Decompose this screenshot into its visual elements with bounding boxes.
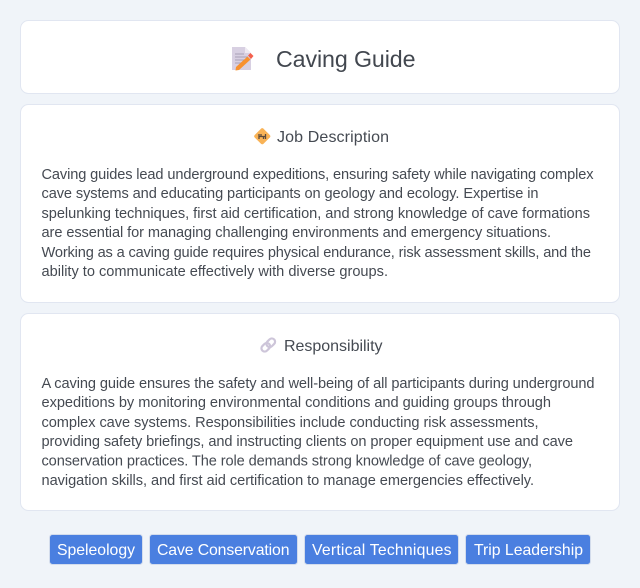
heading: Responsibility: Responsibility [284,338,382,355]
tag: Cave Conservation [150,534,298,564]
tag: Cave Conservation: Cave Conservation [157,542,290,559]
text: responsibility paragraph: navigation skills, and first aid certification to manage emergencies effectively. [42,473,534,489]
text: job description paragraph: Caving guides lead underground expeditions, ensuring safety while navigating complex [42,167,594,183]
text: responsibility paragraph: complex cave systems. Responsibilities include conducting risk assessments, [42,415,538,431]
text: job description paragraph [42,167,594,280]
panel: job description [20,104,620,302]
text: responsibility paragraph: providing safety briefings, and instructing clients on proper equipment use and cave [42,434,573,450]
text: responsibility paragraph: conservation practices. The role demands strong knowledge of cave geology, [42,454,532,470]
panel: responsibility [20,314,620,510]
icon: diamond road sign [253,127,271,145]
text: job description paragraph: are essential for managing challenging environments and emergency situations. [42,225,551,241]
text: job description paragraph: spelunking techniques, first aid certification, and strong knowledge of cave formations [42,206,590,222]
tags row [50,534,590,564]
tag: Trip Leadership [466,534,590,564]
text: job description paragraph: cave systems and educating participants on geology and ecology. Expertise in [42,186,538,202]
panel: title [20,20,620,94]
tag: Trip Leadership: Trip Leadership [474,542,583,559]
tag: Vertical Techniques [304,534,458,564]
text: responsibility paragraph [42,376,594,489]
tag: Speleology [50,534,142,564]
text: job description paragraph: Working as a caving guide requires physical endurance, risk assessment skills, and the [42,245,591,261]
text: responsibility paragraph: A caving guide ensures the safety and well-being of all participants during underground [42,376,594,392]
icon: document with pencil [232,47,254,70]
tag: Speleology: Speleology [57,542,135,559]
heading: Caving Guide: Caving Guide [276,46,416,72]
text: responsibility paragraph: expeditions by monitoring environmental conditions and guiding groups through [42,395,551,411]
text: job description paragraph: ability to communicate effectively with diverse groups. [42,264,388,280]
icon: chain link [260,337,276,353]
heading: Job Description: Job Description [277,129,389,146]
tag: Vertical Techniques: Vertical Techniques [312,542,452,559]
